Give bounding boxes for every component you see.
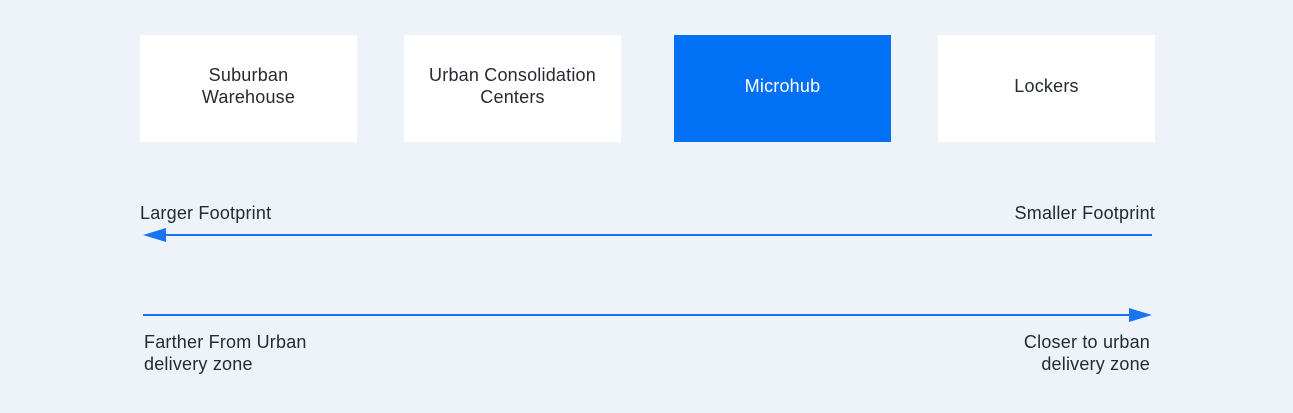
box: suburban warehouse: Warehouse [202,87,295,107]
box: urban consolidation centers: Centers [480,87,545,107]
label: closer to urban delivery zone [1024,332,1150,374]
label: closer to urban delivery zone: delivery zone [1041,354,1150,374]
label: closer to urban delivery zone: Closer to urban [1024,332,1150,352]
box: microhub: Microhub [745,76,820,96]
box: urban consolidation centers [404,35,621,142]
label: farther from urban delivery zone: delivery zone [144,354,253,374]
box: lockers [938,35,1155,142]
box: urban consolidation centers: Urban Consolidation [429,65,596,85]
label: smaller footprint: Smaller Footprint [1015,203,1155,223]
label: farther from urban delivery zone [144,332,307,374]
box: microhub [674,35,891,142]
box: lockers: Lockers [1014,76,1079,96]
box: suburban warehouse: Suburban [209,65,288,85]
label: farther from urban delivery zone: Farther From Urban [144,332,307,352]
box: suburban warehouse [140,35,357,142]
label: larger footprint: Larger Footprint [140,203,271,223]
